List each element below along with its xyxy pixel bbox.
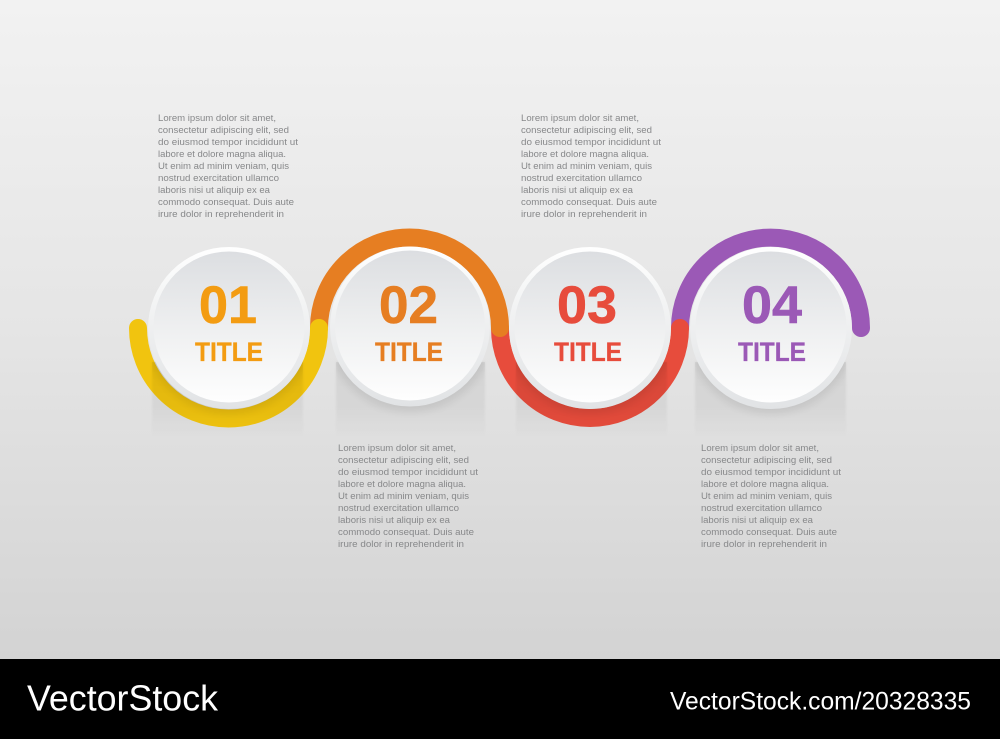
step 01: [148, 247, 310, 409]
text block 02: commodo consequat. Duis aute: [338, 527, 474, 538]
text block 04: Lorem ipsum dolor sit amet,: [701, 443, 819, 454]
connector arc: purple: [680, 238, 861, 328]
cast shadows: [152, 362, 846, 418]
text block 04: commodo consequat. Duis aute: [701, 527, 837, 538]
number 04: 04: [742, 276, 803, 335]
text block 04: laboris nisi ut aliquip ex ea: [701, 515, 814, 526]
text block 01: laboris nisi ut aliquip ex ea: [158, 185, 271, 196]
text block 03: irure dolor in reprehenderit in: [521, 209, 647, 220]
text block 01: irure dolor in reprehenderit in: [158, 209, 284, 220]
text block 01: nostrud exercitation ullamco: [158, 173, 279, 184]
number 02: 02: [379, 276, 438, 335]
text block 02: laboris nisi ut aliquip ex ea: [338, 515, 451, 526]
text block 01: Ut enim ad minim veniam, quis: [158, 161, 289, 172]
text block 01: labore et dolore magna aliqua.: [158, 149, 286, 160]
step 02: [330, 246, 490, 406]
text block 03: commodo consequat. Duis aute: [521, 197, 657, 208]
text block 04: labore et dolore magna aliqua.: [701, 479, 829, 490]
text block 02: Ut enim ad minim veniam, quis: [338, 491, 469, 502]
text block 02: [338, 443, 478, 550]
text block 01: [158, 113, 298, 220]
text block 02: irure dolor in reprehenderit in: [338, 539, 464, 550]
text block 02: labore et dolore magna aliqua.: [338, 479, 466, 490]
circle 03: [509, 247, 671, 409]
text block 01: do eiusmod tempor incididunt ut: [158, 137, 298, 148]
text block 03: Lorem ipsum dolor sit amet,: [521, 113, 639, 124]
text block 02: Lorem ipsum dolor sit amet,: [338, 443, 456, 454]
title 01: TITLE: [195, 337, 263, 367]
number 01: 01: [199, 276, 257, 335]
text block 01: Lorem ipsum dolor sit amet,: [158, 113, 276, 124]
text block 03: do eiusmod tempor incididunt ut: [521, 137, 661, 148]
text block 03: nostrud exercitation ullamco: [521, 173, 642, 184]
circle 04: [690, 247, 852, 409]
text block 02: consectetur adipiscing elit, sed: [338, 455, 469, 466]
text block 04: nostrud exercitation ullamco: [701, 503, 822, 514]
text block 03: consectetur adipiscing elit, sed: [521, 125, 652, 136]
connector arc: red: [500, 328, 680, 418]
text block 01: commodo consequat. Duis aute: [158, 197, 294, 208]
text block 04: Ut enim ad minim veniam, quis: [701, 491, 832, 502]
watermark url: VectorStock.com/20328335: [670, 688, 971, 716]
text block 04: consectetur adipiscing elit, sed: [701, 455, 832, 466]
title 02: TITLE: [375, 337, 443, 367]
text block 04: irure dolor in reprehenderit in: [701, 539, 827, 550]
step 03: [509, 247, 671, 409]
text block 03: [521, 113, 661, 220]
title 04: TITLE: [738, 337, 806, 367]
connector arc: yellow: [138, 328, 319, 418]
text block 04: do eiusmod tempor incididunt ut: [701, 467, 841, 478]
text block 03: Ut enim ad minim veniam, quis: [521, 161, 652, 172]
text block 03: labore et dolore magna aliqua.: [521, 149, 649, 160]
text block 02: nostrud exercitation ullamco: [338, 503, 459, 514]
connector arc: orange: [319, 238, 500, 328]
text block 01: consectetur adipiscing elit, sed: [158, 125, 289, 136]
text block 02: do eiusmod tempor incididunt ut: [338, 467, 478, 478]
number 03: 03: [557, 276, 617, 335]
watermark logo: VectorStock: [27, 678, 219, 718]
title 03: TITLE: [554, 337, 622, 367]
step 04: [690, 247, 852, 409]
circle 02: [330, 246, 490, 406]
watermark footer bar: [0, 659, 1000, 739]
text block 04: [701, 443, 841, 550]
circle 01: [148, 247, 310, 409]
text block 03: laboris nisi ut aliquip ex ea: [521, 185, 634, 196]
